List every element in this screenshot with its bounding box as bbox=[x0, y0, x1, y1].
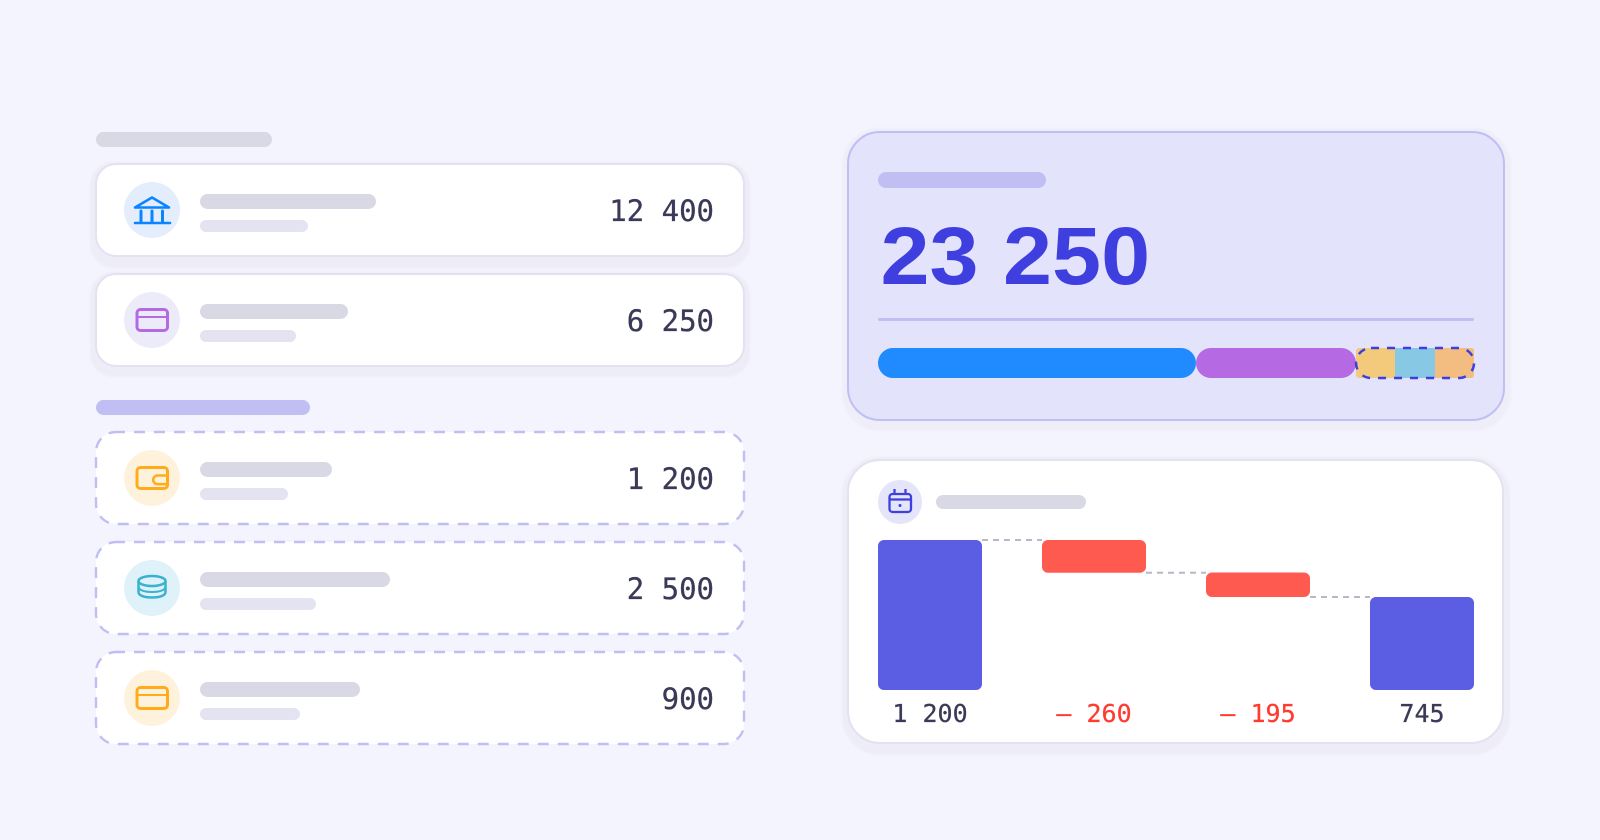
panel: waterfall chart: – 260 bbox=[1056, 699, 1132, 728]
panel: savings row bbox=[96, 542, 744, 634]
panel: bank account row bbox=[90, 162, 750, 268]
panel: bank account row: 12 400 bbox=[609, 194, 714, 228]
panel: card account row bbox=[90, 272, 750, 377]
panel: card account row: 6 250 bbox=[627, 304, 714, 338]
panel: savings row: 2 500 bbox=[627, 572, 714, 606]
panel: total balance bbox=[842, 128, 1511, 431]
panel: waterfall chart: – 195 bbox=[1220, 699, 1296, 728]
panel: waterfall chart: 1 200 bbox=[892, 699, 968, 728]
panel: waterfall chart bbox=[842, 457, 1510, 755]
stacked balance bar bbox=[878, 348, 1474, 378]
icon: calendar bbox=[878, 480, 922, 524]
panel: wallet row bbox=[96, 432, 744, 524]
total number: 23 250 bbox=[880, 211, 1150, 302]
heading placeholder: pending accounts bbox=[96, 400, 310, 415]
panel: other card row bbox=[96, 652, 744, 744]
panel: wallet row: 1 200 bbox=[627, 462, 714, 496]
panel: waterfall chart: 745 bbox=[1399, 699, 1445, 728]
panel: other card row: 900 bbox=[662, 682, 714, 716]
heading placeholder: confirmed accounts bbox=[96, 132, 272, 147]
